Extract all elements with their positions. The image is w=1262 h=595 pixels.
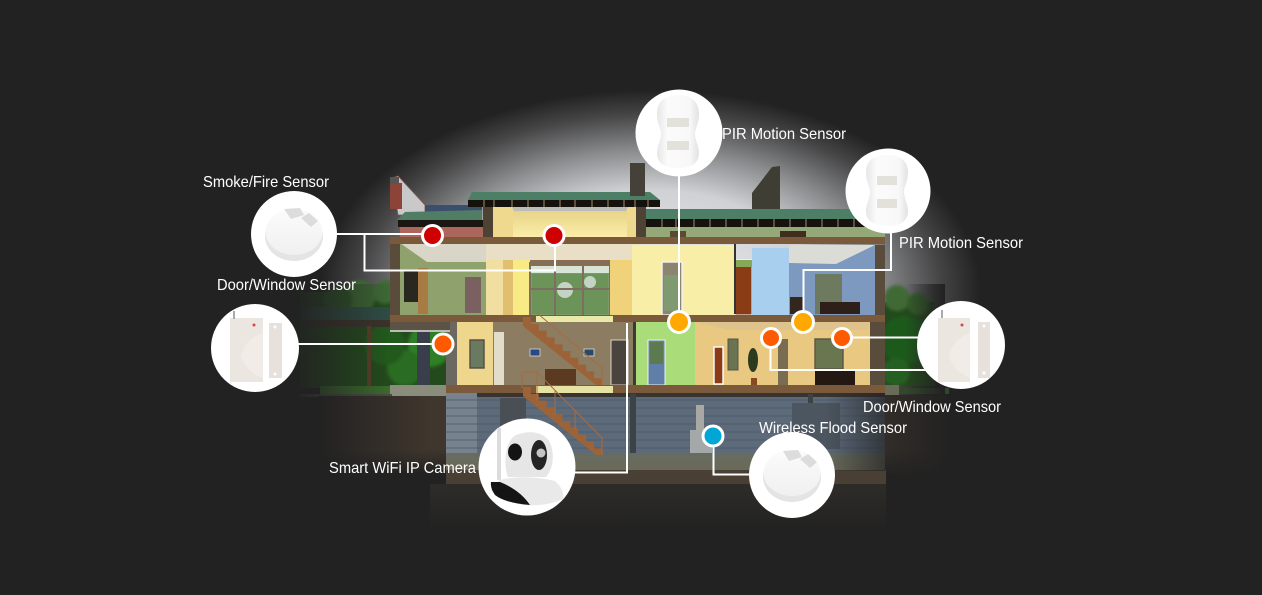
trees on right [881, 284, 949, 396]
centre yellow atrium [486, 243, 640, 315]
door sensor line left [298, 343, 432, 345]
hall [493, 322, 633, 385]
red dot 1 [422, 226, 442, 246]
PIR sensor badge right [846, 148, 930, 234]
floor beams [390, 237, 885, 393]
amber dot 1 [668, 312, 690, 332]
orange dot left [433, 334, 453, 354]
label: PIR motion sensor right: PIR Motion Sensor [899, 235, 1024, 252]
upper stairs [523, 313, 602, 385]
house [390, 163, 885, 471]
smoke sensor lines [336, 234, 555, 270]
door sensor badge right [917, 301, 1005, 389]
right roof [646, 209, 885, 238]
second floor rooms [390, 243, 885, 315]
PIR line 2 [804, 230, 891, 312]
door sensor lines right [770, 338, 926, 370]
bottom fade [420, 490, 900, 530]
camera badge [478, 418, 576, 516]
trees and pavilion on left [290, 280, 452, 398]
ground [318, 394, 965, 530]
orange dot 3 [832, 328, 852, 348]
PIR line 1 [678, 175, 680, 312]
marker dots [422, 226, 852, 446]
flood sensor badge [749, 432, 835, 518]
label: door/window sensor left: Door/Window Sensor [217, 277, 357, 294]
left wall [446, 322, 457, 386]
label: door/window sensor right: Door/Window Sensor [863, 399, 1002, 416]
label: smoke/fire sensor: Smoke/Fire Sensor [203, 174, 330, 191]
centre roof [468, 192, 660, 207]
centre chimney [630, 163, 645, 196]
basement [446, 393, 885, 471]
dark blue dining room [789, 245, 885, 315]
lower stairs [522, 372, 602, 455]
peach living room [695, 322, 885, 385]
PIR sensor badge top [636, 90, 722, 176]
label: smart wifi ip camera: Smart WiFi IP Camera [329, 460, 476, 477]
connector lines [298, 175, 926, 474]
smoke sensor badge [251, 191, 337, 277]
amber dot 2 [792, 312, 814, 332]
attic room [483, 207, 646, 238]
first floor rooms [446, 322, 885, 386]
flood line [714, 446, 752, 474]
label: wireless flood sensor: Wireless Flood Sensor [759, 420, 908, 437]
left chimney and gable [390, 176, 425, 215]
blue dot [703, 426, 723, 446]
orange dot 2 [762, 328, 780, 348]
red dot 2 [544, 226, 564, 246]
right chimney [752, 166, 780, 215]
door sensor badge left [211, 304, 299, 392]
light blue room [752, 248, 789, 315]
left side roof [397, 205, 484, 238]
left green room [390, 243, 486, 315]
yellow room lower left [457, 322, 493, 385]
yellow room [632, 244, 752, 315]
glow behind house [320, 90, 980, 490]
camera line [574, 323, 627, 472]
green room [636, 322, 695, 385]
label: PIR motion sensor top: PIR Motion Sensor [722, 126, 847, 143]
